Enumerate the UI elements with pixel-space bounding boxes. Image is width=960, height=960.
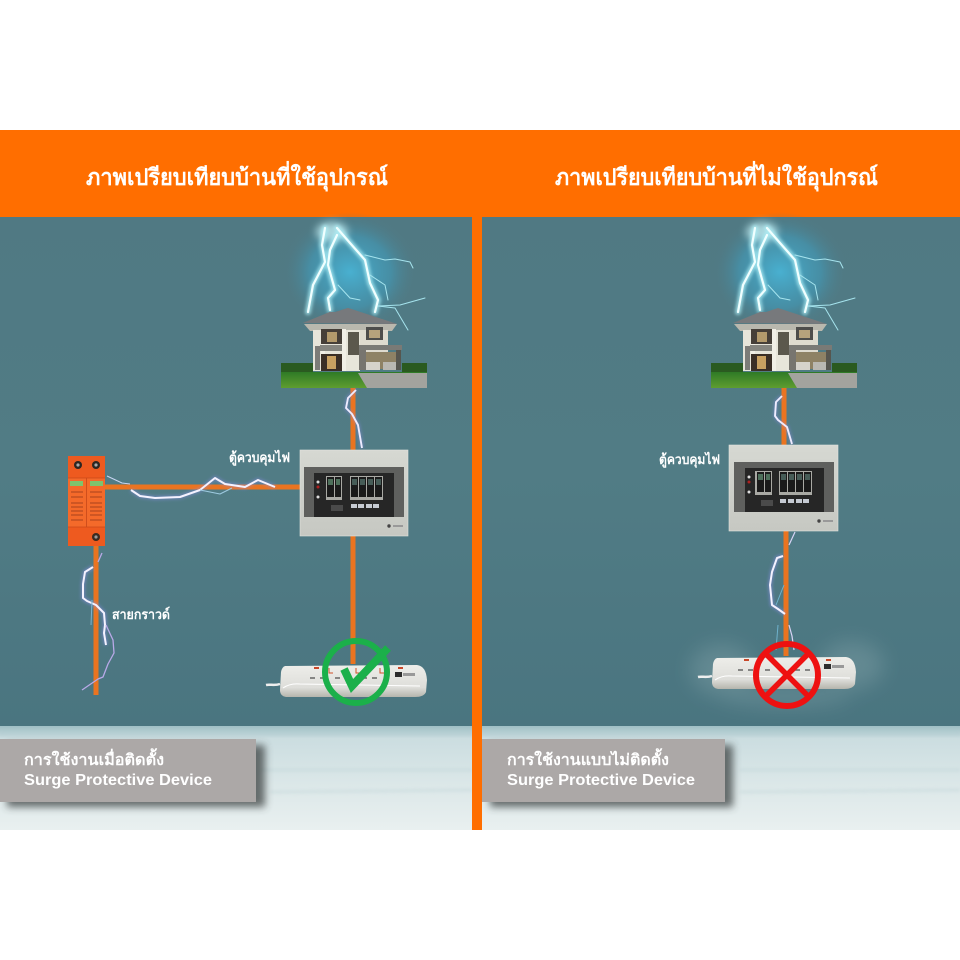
label: control cabinet left: ตู้ควบคุมไฟ — [229, 449, 290, 466]
icon: distribution panel right — [729, 445, 838, 531]
icon: power strip right — [698, 657, 856, 689]
right scene wires — [784, 386, 786, 656]
lightning on horizontal wire — [107, 476, 275, 498]
centre orange divider — [472, 217, 482, 830]
lightning on ground wire — [82, 553, 114, 690]
icon: house left — [281, 308, 427, 388]
callout: right caption — [482, 739, 733, 807]
lightning on lower wire right — [770, 532, 795, 650]
callout: left caption: Surge Protective Device — [24, 772, 212, 789]
callout: right caption: การใช้งานแบบไม่ติดตั้ง — [507, 748, 669, 769]
icon: power strip left — [266, 665, 427, 697]
heading: left: ภาพเปรียบเทียบบ้านที่ใช้อุปกรณ์ — [86, 160, 388, 192]
callout: left caption — [0, 739, 265, 807]
heading: right: ภาพเปรียบเทียบบ้านที่ไม่ใช้อุปกรณ์ — [555, 160, 878, 192]
icon: distribution panel left — [300, 450, 408, 536]
floor right — [482, 726, 960, 830]
icon: lightning right — [712, 212, 855, 332]
smoke around damaged strip — [690, 641, 884, 706]
panel: left wall background — [0, 217, 472, 727]
callout: left caption: การใช้งานเมื่อติดตั้ง — [24, 748, 164, 769]
panel: right wall background — [482, 217, 960, 727]
icon: green check — [325, 641, 388, 703]
lightning on upper wire left — [346, 390, 362, 448]
icon: house right — [711, 308, 857, 388]
icon: surge protective device — [68, 456, 105, 546]
label: control cabinet right: ตู้ควบคุมไฟ — [659, 451, 720, 468]
callout: right caption: Surge Protective Device — [507, 772, 695, 789]
label: ground wire: สายกราวด์ — [112, 606, 170, 622]
icon: lightning left — [282, 212, 425, 332]
floor left — [0, 726, 472, 830]
left scene wires — [96, 386, 353, 695]
icon: red cross — [756, 644, 818, 706]
lightning on upper wire right — [775, 396, 792, 444]
header band — [0, 130, 960, 217]
